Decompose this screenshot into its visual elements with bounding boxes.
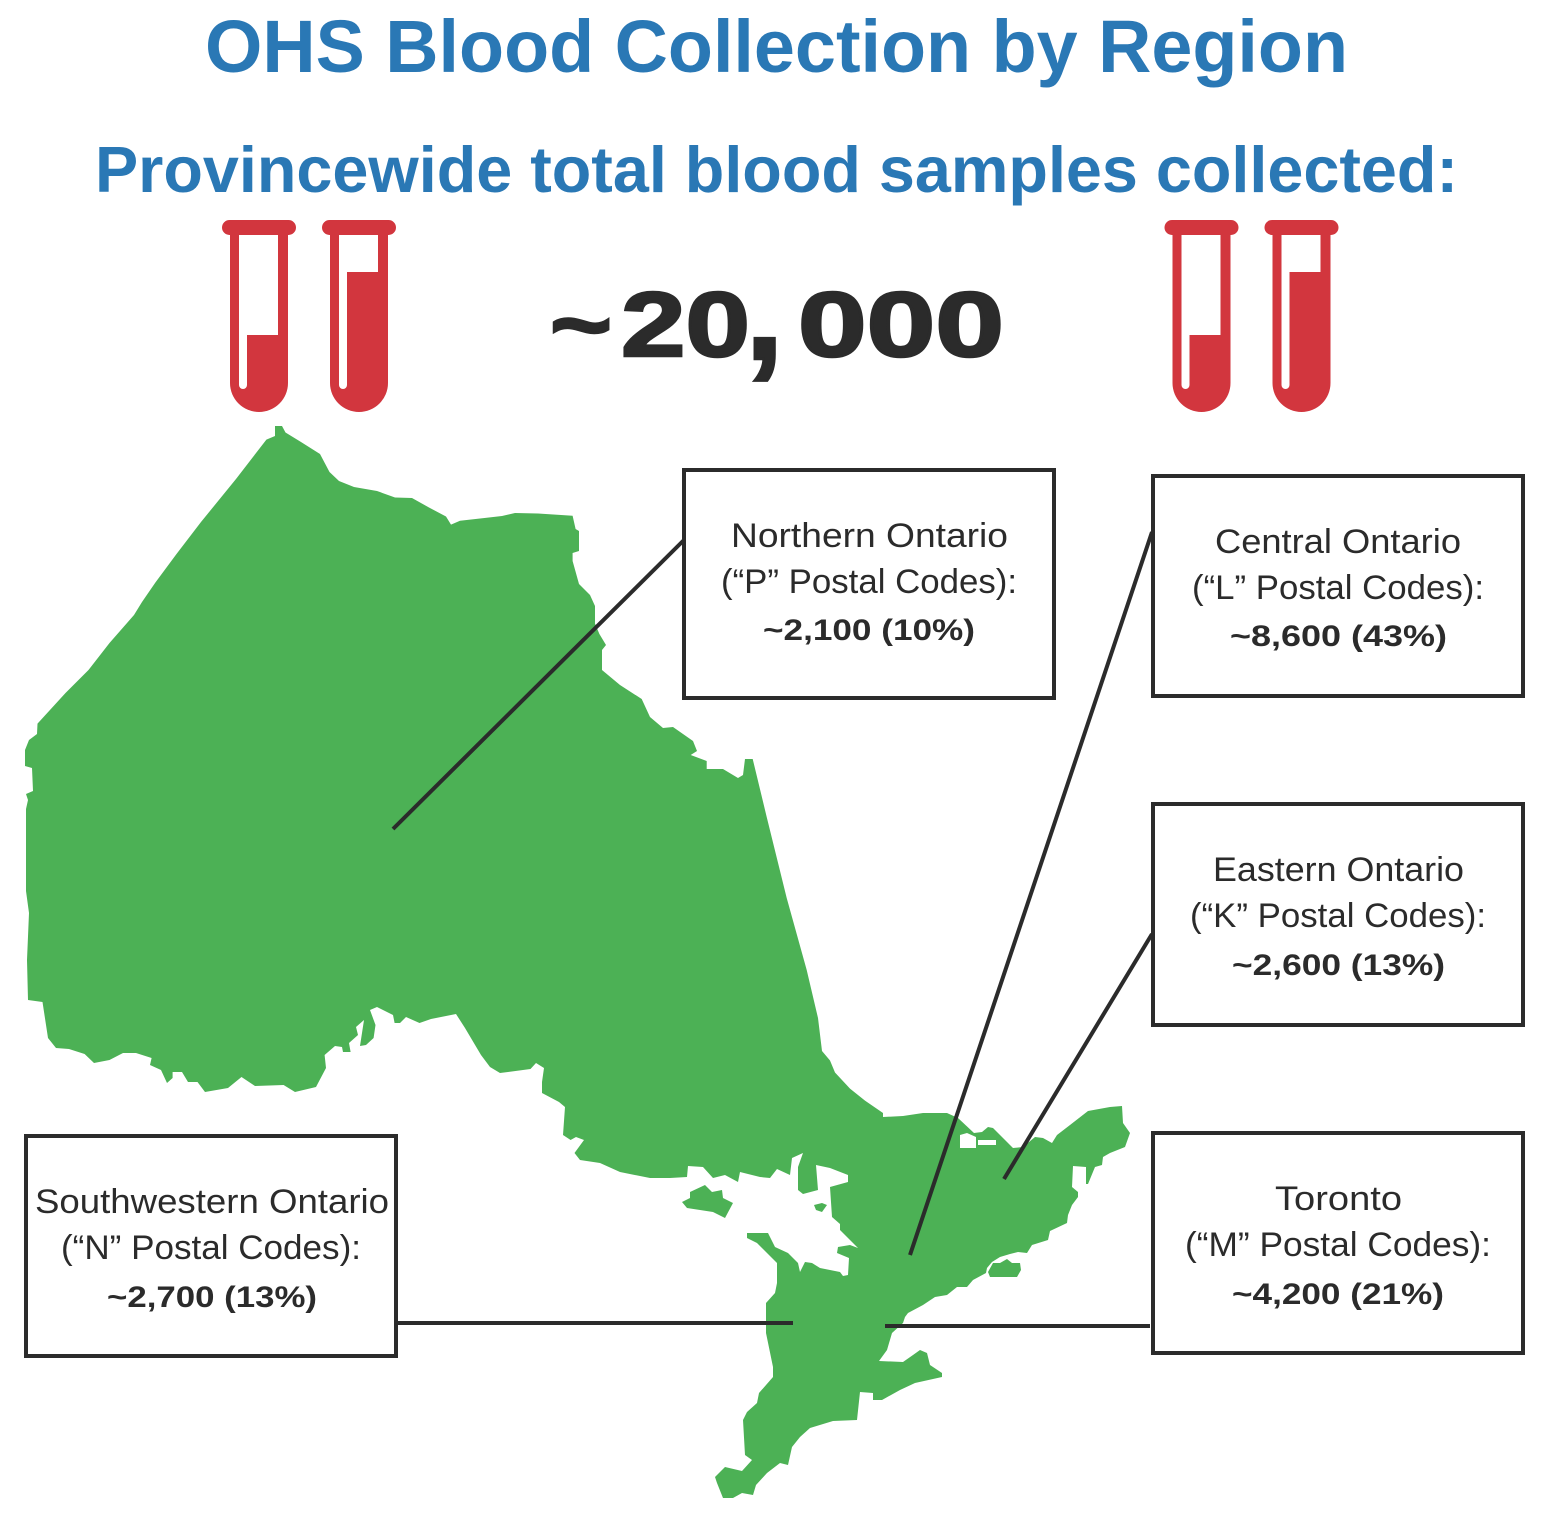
callout: Southwestern Ontario: ~2,700 (13%): [107, 1281, 317, 1314]
callout: Eastern Ontario: (“K” Postal Codes):: [1190, 897, 1486, 935]
subtitle: Provincewide total blood samples collected:: [95, 133, 1458, 206]
callout: Eastern Ontario: [1004, 804, 1523, 1179]
callout: Southwestern Ontario: [26, 1136, 793, 1356]
callout: Northern Ontario: [393, 470, 1054, 829]
map of Ontario: [25, 426, 1130, 1498]
total number: ,: [745, 232, 784, 389]
icon: test tubes right: [1164, 220, 1338, 412]
callout: Northern Ontario: (“P” Postal Codes):: [721, 563, 1017, 601]
callout: Eastern Ontario: ~2,600 (13%): [1232, 949, 1445, 982]
total number: 20: [621, 274, 750, 376]
callout: Toronto: ~4,200 (21%): [1232, 1278, 1444, 1311]
callout: Central Ontario: [910, 476, 1523, 1255]
total number: 000: [798, 274, 1004, 376]
callout: Southwestern Ontario: Southwestern Ontario: [35, 1183, 389, 1221]
callout: Eastern Ontario: Eastern Ontario: [1213, 851, 1464, 889]
callout: Central Ontario: Central Ontario: [1215, 523, 1461, 561]
total number: ~: [550, 274, 612, 376]
callout: Southwestern Ontario: (“N” Postal Codes):: [61, 1229, 361, 1267]
callout: Central Ontario: ~8,600 (43%): [1230, 620, 1447, 653]
callout: Northern Ontario: ~2,100 (10%): [763, 614, 975, 647]
icon: test tubes left: [222, 220, 396, 412]
callout: Toronto: Toronto: [1275, 1180, 1402, 1218]
title: OHS Blood Collection by Region: [205, 5, 1348, 88]
callout: Toronto: [885, 1133, 1523, 1353]
callout: Toronto: (“M” Postal Codes):: [1185, 1226, 1491, 1264]
callout: Central Ontario: (“L” Postal Codes):: [1192, 569, 1484, 607]
callout: Northern Ontario: Northern Ontario: [731, 517, 1008, 555]
